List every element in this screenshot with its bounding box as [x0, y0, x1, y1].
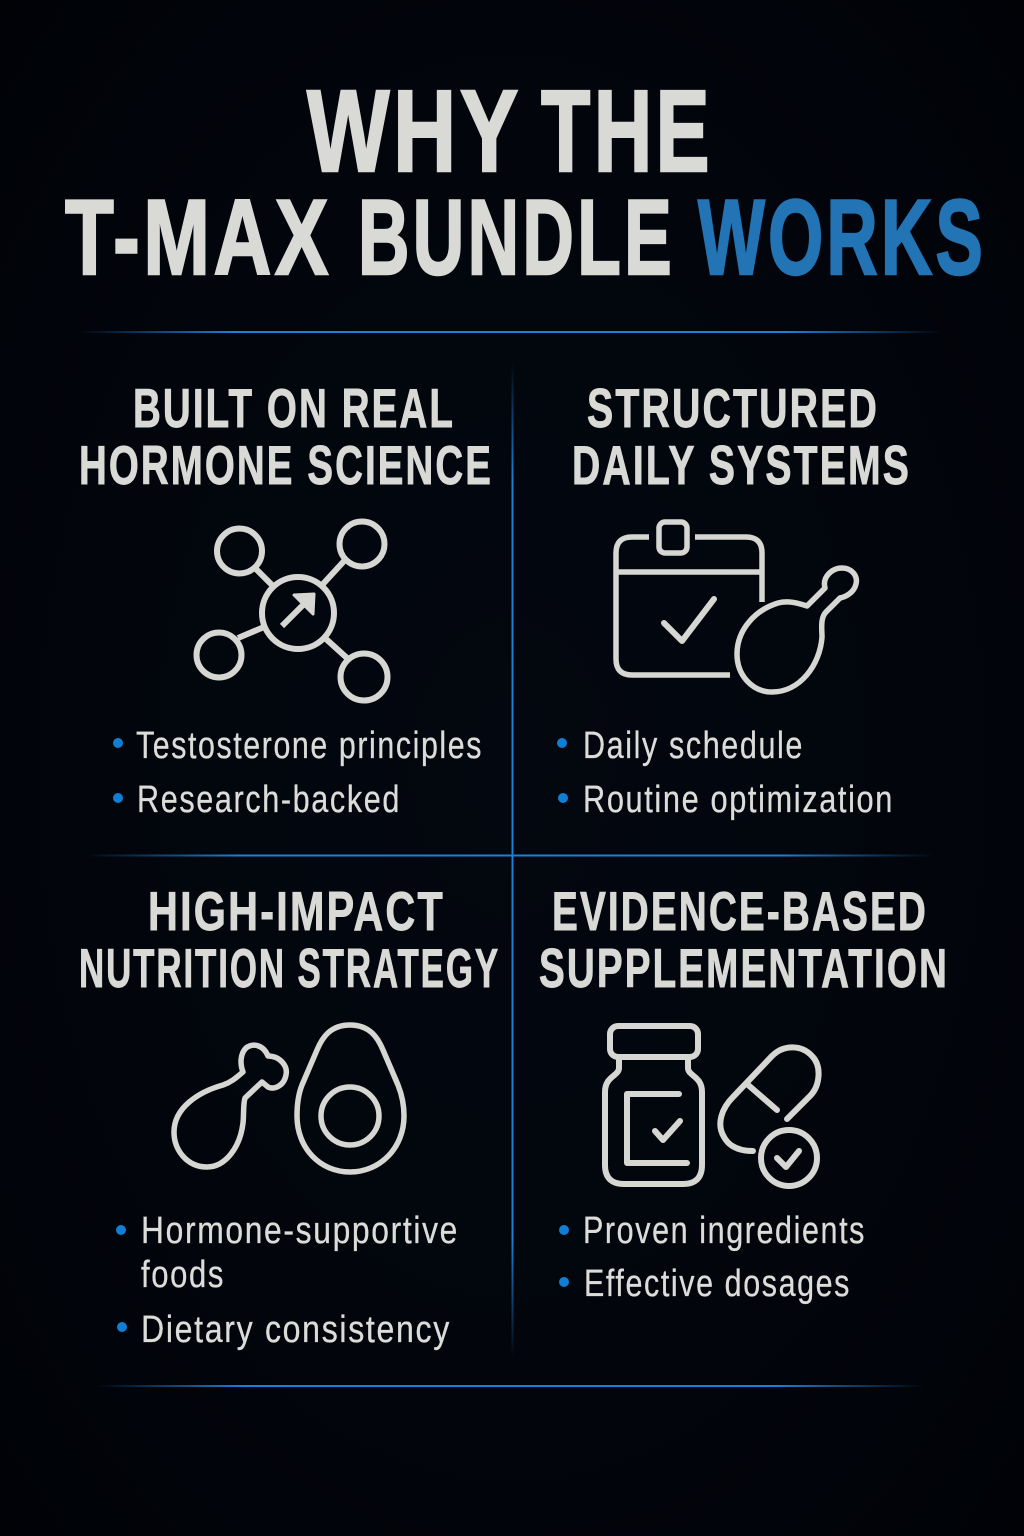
heading: built on real hormone science [79, 377, 493, 496]
heading: high-impact nutrition strategy: HIGH-IMPACT [148, 880, 445, 942]
title: T-MAX [65, 177, 332, 297]
icon: calendar and drumstick [616, 522, 856, 692]
heading: structured daily systems [572, 377, 911, 496]
bullet list: supplementation [559, 1210, 866, 1305]
bullet list: nutrition: Hormone-supportive [141, 1210, 459, 1252]
heading: high-impact nutrition strategy [79, 880, 500, 999]
bullet list: daily systems: Routine optimization [583, 779, 894, 821]
heading: built on real hormone science: HORMONE SCIENCE [79, 434, 493, 496]
bullet list: hormone science: Testosterone principles [136, 725, 483, 767]
heading: evidence-based supplementation [539, 880, 949, 999]
title: BUNDLE [358, 177, 675, 297]
panel: structured daily systems [557, 377, 911, 821]
panel: built on real hormone science [79, 377, 493, 821]
heading: built on real hormone science: BUILT ON REAL [133, 377, 455, 439]
title [65, 66, 986, 297]
bullet list: nutrition: foods [141, 1254, 225, 1296]
bullet list: daily systems: Daily schedule [583, 725, 804, 767]
panel: high-impact nutrition strategy [79, 880, 500, 1351]
bullet list: supplementation: Effective dosages [584, 1263, 851, 1305]
heading: structured daily systems: STRUCTURED [587, 377, 879, 439]
bullet list: nutrition [116, 1210, 459, 1351]
icon: hormone network [196, 522, 388, 700]
icon: supplement bottle, capsule and check [605, 1026, 819, 1186]
panel: evidence-based supplementation [539, 880, 949, 1305]
heading: high-impact nutrition strategy: NUTRITION STRATEGY [79, 937, 500, 999]
bullet list: hormone science [113, 725, 483, 821]
bullet list: hormone science: Research-backed [137, 779, 401, 821]
bullet list: nutrition: Dietary consistency [141, 1309, 451, 1351]
icon: drumstick and avocado [174, 1025, 404, 1172]
bullet list: supplementation: Proven ingredients [583, 1210, 866, 1252]
title: THE [541, 66, 713, 196]
title: WHY [307, 66, 522, 196]
bullet list: daily systems [557, 725, 894, 821]
